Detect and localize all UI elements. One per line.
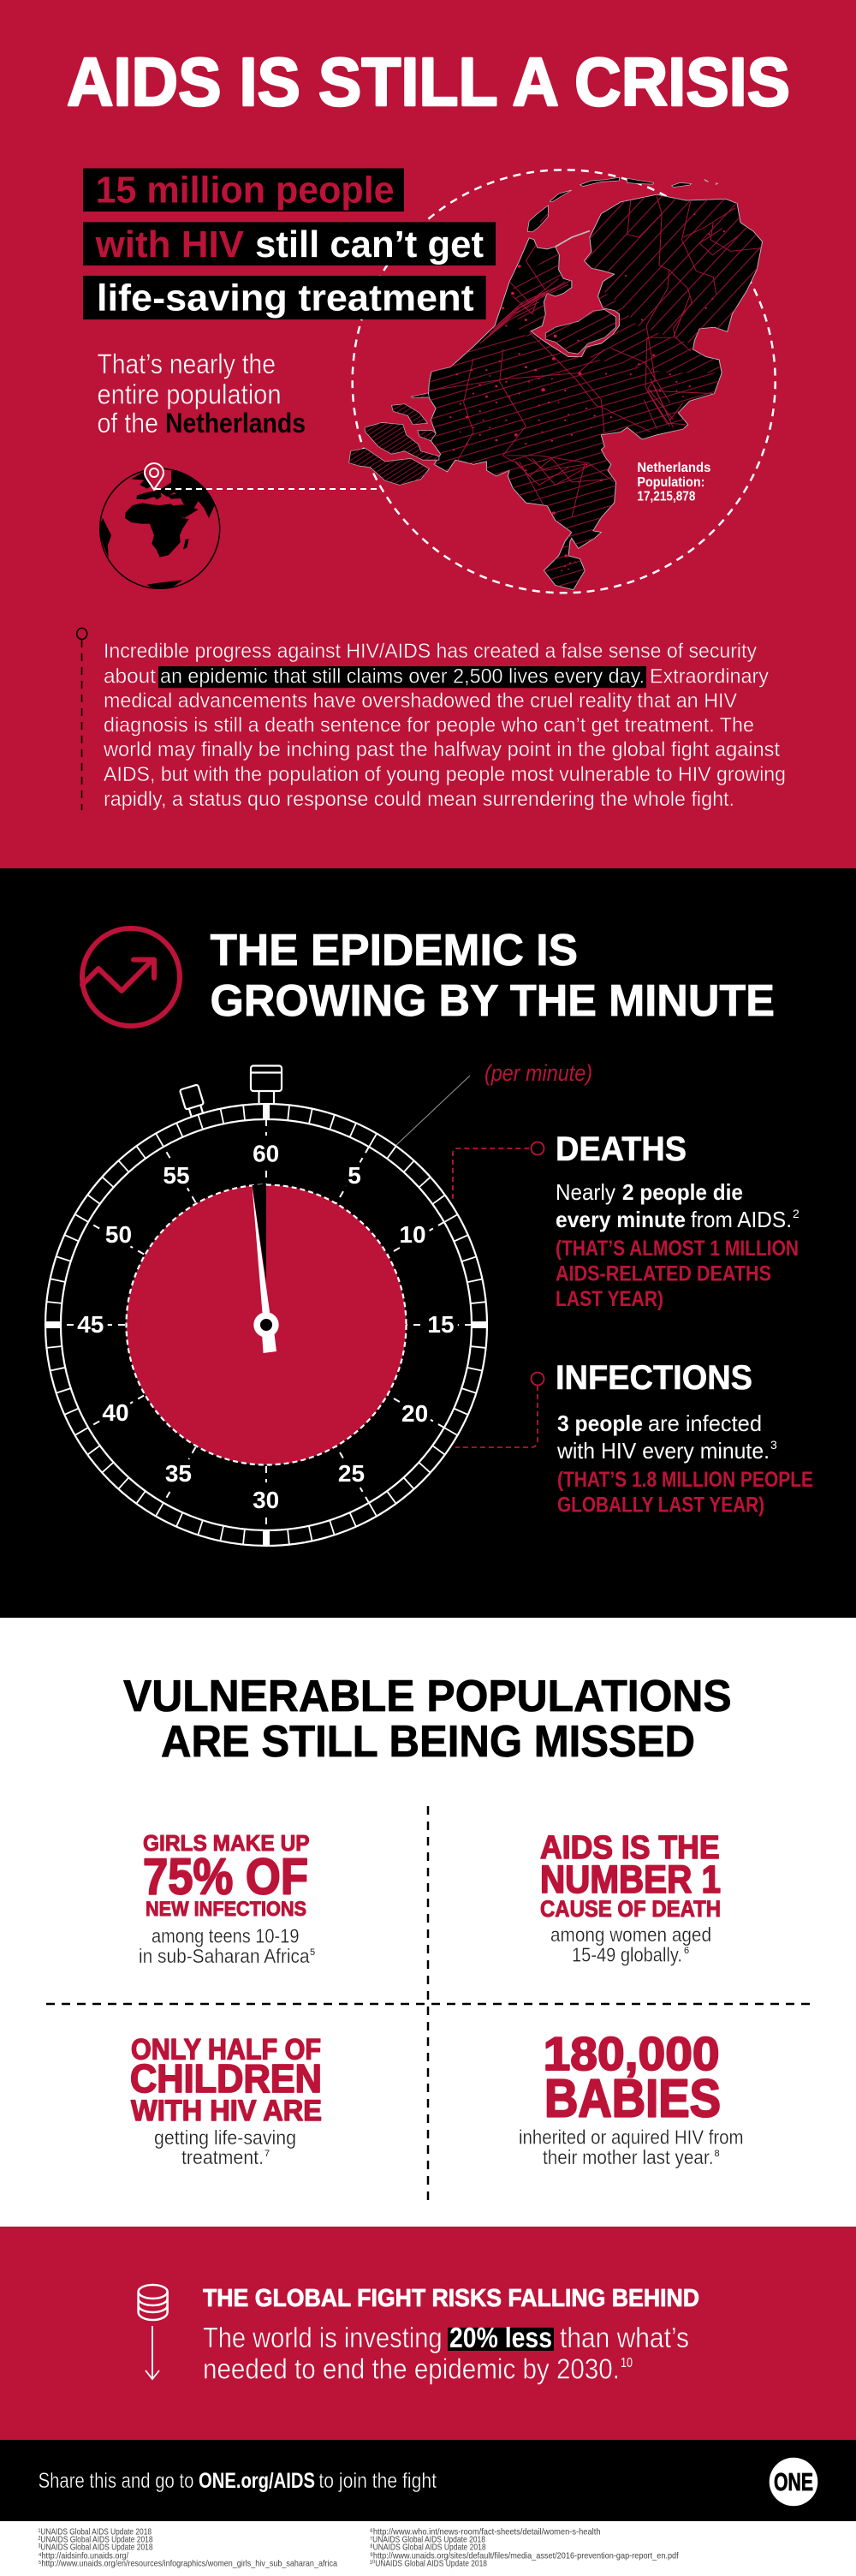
stat: girls 75 percent: 75% OF	[143, 1849, 308, 1905]
panel: footer black background	[0, 2440, 856, 2521]
text block: introduction paragraph: world may finally be inching past the halfway point in the global fight against	[103, 738, 780, 761]
text block: deaths: 2 people die	[622, 1179, 743, 1205]
stopwatch: black elapsed wedge	[252, 1184, 266, 1282]
stopwatch: minute numbers: 40	[102, 1399, 129, 1426]
stat: girls 75 percent: among teens 10-19	[152, 1925, 300, 1947]
stat: girls 75 percent: NEW INFECTIONS	[146, 1898, 306, 1921]
text block: introduction paragraph: about	[104, 665, 156, 688]
stat: 180,000 babies: their mother last year.	[543, 2146, 714, 2168]
text block: infections: 3	[770, 1438, 777, 1452]
text block: investing 20% less: 10	[621, 2356, 633, 2370]
text block: deaths: DEATHS	[556, 1130, 687, 1168]
footer call to action	[39, 2469, 437, 2493]
text block: infections: INFECTIONS	[556, 1359, 752, 1397]
text block: introduction paragraph: Incredible progress against HIV/AIDS has created a false sense of security	[104, 640, 757, 663]
text block: infections	[556, 1359, 813, 1518]
text block: infections: (THAT’S 1.8 MILLION PEOPLE	[557, 1468, 813, 1492]
stat: 180,000 babies: BABIES	[544, 2069, 721, 2128]
headline line 1: 15 million people	[96, 170, 395, 211]
headline boxes	[83, 168, 496, 319]
stat: leading cause of death	[540, 1830, 721, 1966]
text block: deaths	[556, 1130, 800, 1311]
stat: girls 75 percent	[139, 1830, 315, 1967]
stopwatch: number backings	[74, 1136, 458, 1517]
stopwatch: tick ring	[45, 1104, 487, 1546]
text block: deaths: (THAT’S ALMOST 1 MILLION	[556, 1237, 799, 1261]
stat: leading cause of death: 15-49 globally.	[572, 1944, 682, 1966]
stopwatch: minute numbers: 25	[338, 1460, 365, 1487]
footnotes: ⁹http://www.unaids.org/sites/default/files/media_asset/2016-prevention-gap-report_en.pdf	[370, 2550, 679, 2561]
text block: introduction paragraph	[103, 640, 786, 811]
stat: girls 75 percent: in sub-Saharan Africa	[139, 1945, 310, 1967]
panel: epidemic black background	[0, 868, 856, 1618]
footnotes: ³UNAIDS Global AIDS Update 2018	[39, 2543, 153, 2553]
headline line 3: life-saving treatment	[97, 277, 474, 319]
stat: girls 75 percent: GIRLS MAKE UP	[143, 1830, 310, 1856]
stat: half of children: WITH HIV ARE	[131, 2095, 322, 2127]
map: Flevoland	[545, 309, 616, 354]
stopwatch: minute numbers: 30	[253, 1487, 279, 1513]
label: per minute: (per minute)	[484, 1060, 592, 1086]
text block: infections: are infected	[648, 1410, 762, 1436]
text block: investing 20% less: The world is investing	[203, 2322, 443, 2353]
text block: introduction paragraph: medical advancements have overshadowed the cruel reality that an HIV	[104, 689, 737, 713]
stopwatch: minute numbers: 50	[105, 1221, 132, 1248]
stopwatch: minute numbers: 5	[348, 1162, 361, 1189]
text block: nearly the entire population: of the	[98, 408, 158, 438]
stopwatch: minute numbers: 35	[165, 1460, 192, 1487]
text block: introduction paragraph: Extraordinary	[650, 665, 769, 688]
text block: nearly the entire population: Netherlands	[165, 408, 306, 438]
footnotes: ⁵http://www.unaids.org/en/resources/infographics/women_girls_hiv_sub_saharan_africa	[39, 2559, 337, 2569]
panel: top red background	[0, 0, 856, 868]
stat: half of children: ONLY HALF OF	[131, 2033, 321, 2066]
stat: 180,000 babies: inherited or aquired HIV from	[519, 2126, 744, 2149]
stopwatch: dashed spokes	[61, 1119, 472, 1530]
text block: nearly the entire population: That’s nearly the	[98, 349, 276, 379]
heading: epidemic growing: GROWING BY THE MINUTE	[211, 976, 775, 1026]
headline line 2: with HIV	[95, 224, 245, 265]
text block: investing 20% less	[203, 2322, 689, 2385]
stopwatch: minute numbers: 55	[163, 1162, 190, 1189]
text block: investing 20% less: than what’s	[560, 2322, 689, 2353]
heading: global fight: THE GLOBAL FIGHT RISKS FALLING BEHIND	[203, 2285, 699, 2312]
stopwatch: cardinal ticks	[45, 1104, 487, 1546]
heading: vulnerable populations	[123, 1672, 732, 1767]
map: islands	[349, 177, 718, 485]
stat: leading cause of death: AIDS IS THE	[540, 1830, 720, 1866]
icon: ONE logo: ONE	[774, 2469, 813, 2496]
footnotes: ²UNAIDS Global AIDS Update 2018	[39, 2534, 153, 2544]
stopwatch: minute numbers: 45	[77, 1311, 104, 1338]
stat: 180,000 babies: 180,000	[544, 2027, 720, 2080]
connector: infections	[455, 1372, 544, 1447]
stat: leading cause of death: 6	[684, 1946, 689, 1956]
stopwatch: minute numbers: 10	[399, 1221, 426, 1248]
text block: deaths: 2	[793, 1207, 800, 1220]
stopwatch: minute numbers: 60	[253, 1140, 279, 1166]
marker: dashed timeline for paragraph	[77, 629, 87, 810]
stopwatch: top crown	[251, 1065, 282, 1103]
panel: global fight red background	[0, 2227, 856, 2440]
text block: deaths: Nearly	[556, 1179, 615, 1205]
text block: infections: GLOBALLY LAST YEAR)	[557, 1494, 764, 1518]
text block: nearly the entire population	[98, 349, 306, 438]
text block: investing 20% less: needed to end the epidemic by 2030.	[203, 2353, 620, 2385]
text block: introduction paragraph: rapidly, a status quo response could mean surrendering the whole fight.	[104, 788, 734, 811]
stat: 180,000 babies	[519, 2027, 744, 2168]
footnotes	[39, 2526, 679, 2569]
text block: infections: 3 people	[557, 1410, 643, 1436]
text block: introduction paragraph: AIDS, but with the population of young people most vulnerable to HIV growing	[104, 763, 786, 786]
dashed connector from globe to map	[155, 488, 382, 490]
stat: half of children: 7	[265, 2149, 270, 2159]
chart: stopwatch	[45, 1065, 487, 1546]
dashed quadrant dividers	[46, 1806, 813, 2203]
stopwatch: minute numbers: 20	[401, 1400, 428, 1427]
headline line 2	[83, 222, 496, 265]
arrow: falling down	[146, 2326, 159, 2379]
text block: deaths: every minute	[556, 1207, 686, 1232]
footnotes: ¹⁰UNAIDS Global AIDS Update 2018	[370, 2559, 487, 2569]
stat: 180,000 babies: 8	[714, 2149, 720, 2159]
icon: map of the Netherlands	[342, 177, 775, 597]
text block: deaths: from AIDS.	[691, 1207, 792, 1232]
heading: vulnerable populations: VULNERABLE POPULATIONS	[123, 1672, 732, 1721]
headline line 2: still can’t get	[255, 224, 484, 265]
panel: vulnerable white background	[0, 1618, 856, 2227]
stat: leading cause of death: CAUSE OF DEATH	[540, 1896, 721, 1922]
text block: nearly the entire population: entire population	[98, 379, 281, 409]
stat: half of children: getting life-saving	[154, 2126, 296, 2149]
text block: introduction paragraph: an epidemic that still claims over 2,500 lives every day.	[160, 665, 645, 688]
stopwatch: minute numbers: 15	[427, 1311, 455, 1338]
stat: half of children: CHILDREN	[130, 2056, 322, 2101]
map: Zeeland hatch	[349, 393, 439, 485]
callout: Netherlands population: Population:	[637, 475, 704, 490]
footnotes: ⁷UNAIDS Global AIDS Update 2018	[370, 2534, 485, 2544]
text block: introduction paragraph: diagnosis is still a death sentence for people who can’t get treatment. The	[104, 714, 754, 737]
text block: deaths: AIDS-RELATED DEATHS	[556, 1262, 771, 1286]
heading: epidemic growing	[211, 926, 775, 1026]
stat: girls 75 percent: 5	[310, 1947, 315, 1958]
stat: half of children: treatment.	[181, 2146, 264, 2168]
arrow: per minute leader line	[396, 1076, 470, 1145]
dashed population circle	[353, 170, 776, 593]
heading: epidemic growing: THE EPIDEMIC IS	[211, 926, 578, 975]
stopwatch: side button	[180, 1084, 206, 1118]
map: hatch and roads	[428, 194, 762, 587]
footnotes: ¹UNAIDS Global AIDS Update 2018	[39, 2526, 152, 2537]
text block: infections: with HIV every minute.	[556, 1438, 770, 1464]
icon: ONE logo	[770, 2458, 817, 2506]
footnotes: ⁴http://aidsinfo.unaids.org/	[39, 2550, 128, 2561]
text block: investing 20% less: 20% less	[449, 2322, 552, 2353]
title: AIDS IS STILL A CRISIS	[67, 44, 790, 120]
stopwatch: minute numbers	[77, 1140, 455, 1513]
stat: leading cause of death: NUMBER 1	[540, 1857, 721, 1901]
icon: location pin	[145, 463, 163, 490]
stopwatch: red dial	[127, 1185, 406, 1464]
callout: Netherlands population: Netherlands	[637, 461, 710, 475]
heading: vulnerable populations: ARE STILL BEING MISSED	[161, 1717, 695, 1767]
footnotes: ⁶http://www.who.int/news-room/fact-sheets/detail/women-s-health	[370, 2526, 601, 2537]
icon: rising trend in circle	[82, 928, 180, 1026]
footer call to action: Share this and go to	[39, 2469, 193, 2493]
callout: Netherlands population: 17,215,878	[637, 490, 696, 504]
callout: Netherlands population	[637, 461, 710, 504]
stat: half of children	[130, 2033, 322, 2168]
text block: deaths: LAST YEAR)	[556, 1287, 663, 1311]
map: Afsluitdijk	[556, 231, 590, 247]
stat: leading cause of death: among women aged	[550, 1923, 711, 1946]
icon: stack of coins	[139, 2285, 168, 2320]
footer call to action: ONE.org/AIDS	[199, 2469, 315, 2493]
stopwatch: needle	[252, 1186, 279, 1353]
footnotes: ⁸UNAIDS Global AIDS Update 2018	[370, 2543, 486, 2553]
map: mainland silhouette	[428, 194, 763, 590]
footer call to action: to join the fight	[318, 2469, 437, 2493]
connector: deaths	[453, 1142, 544, 1199]
icon: globe	[98, 468, 220, 589]
